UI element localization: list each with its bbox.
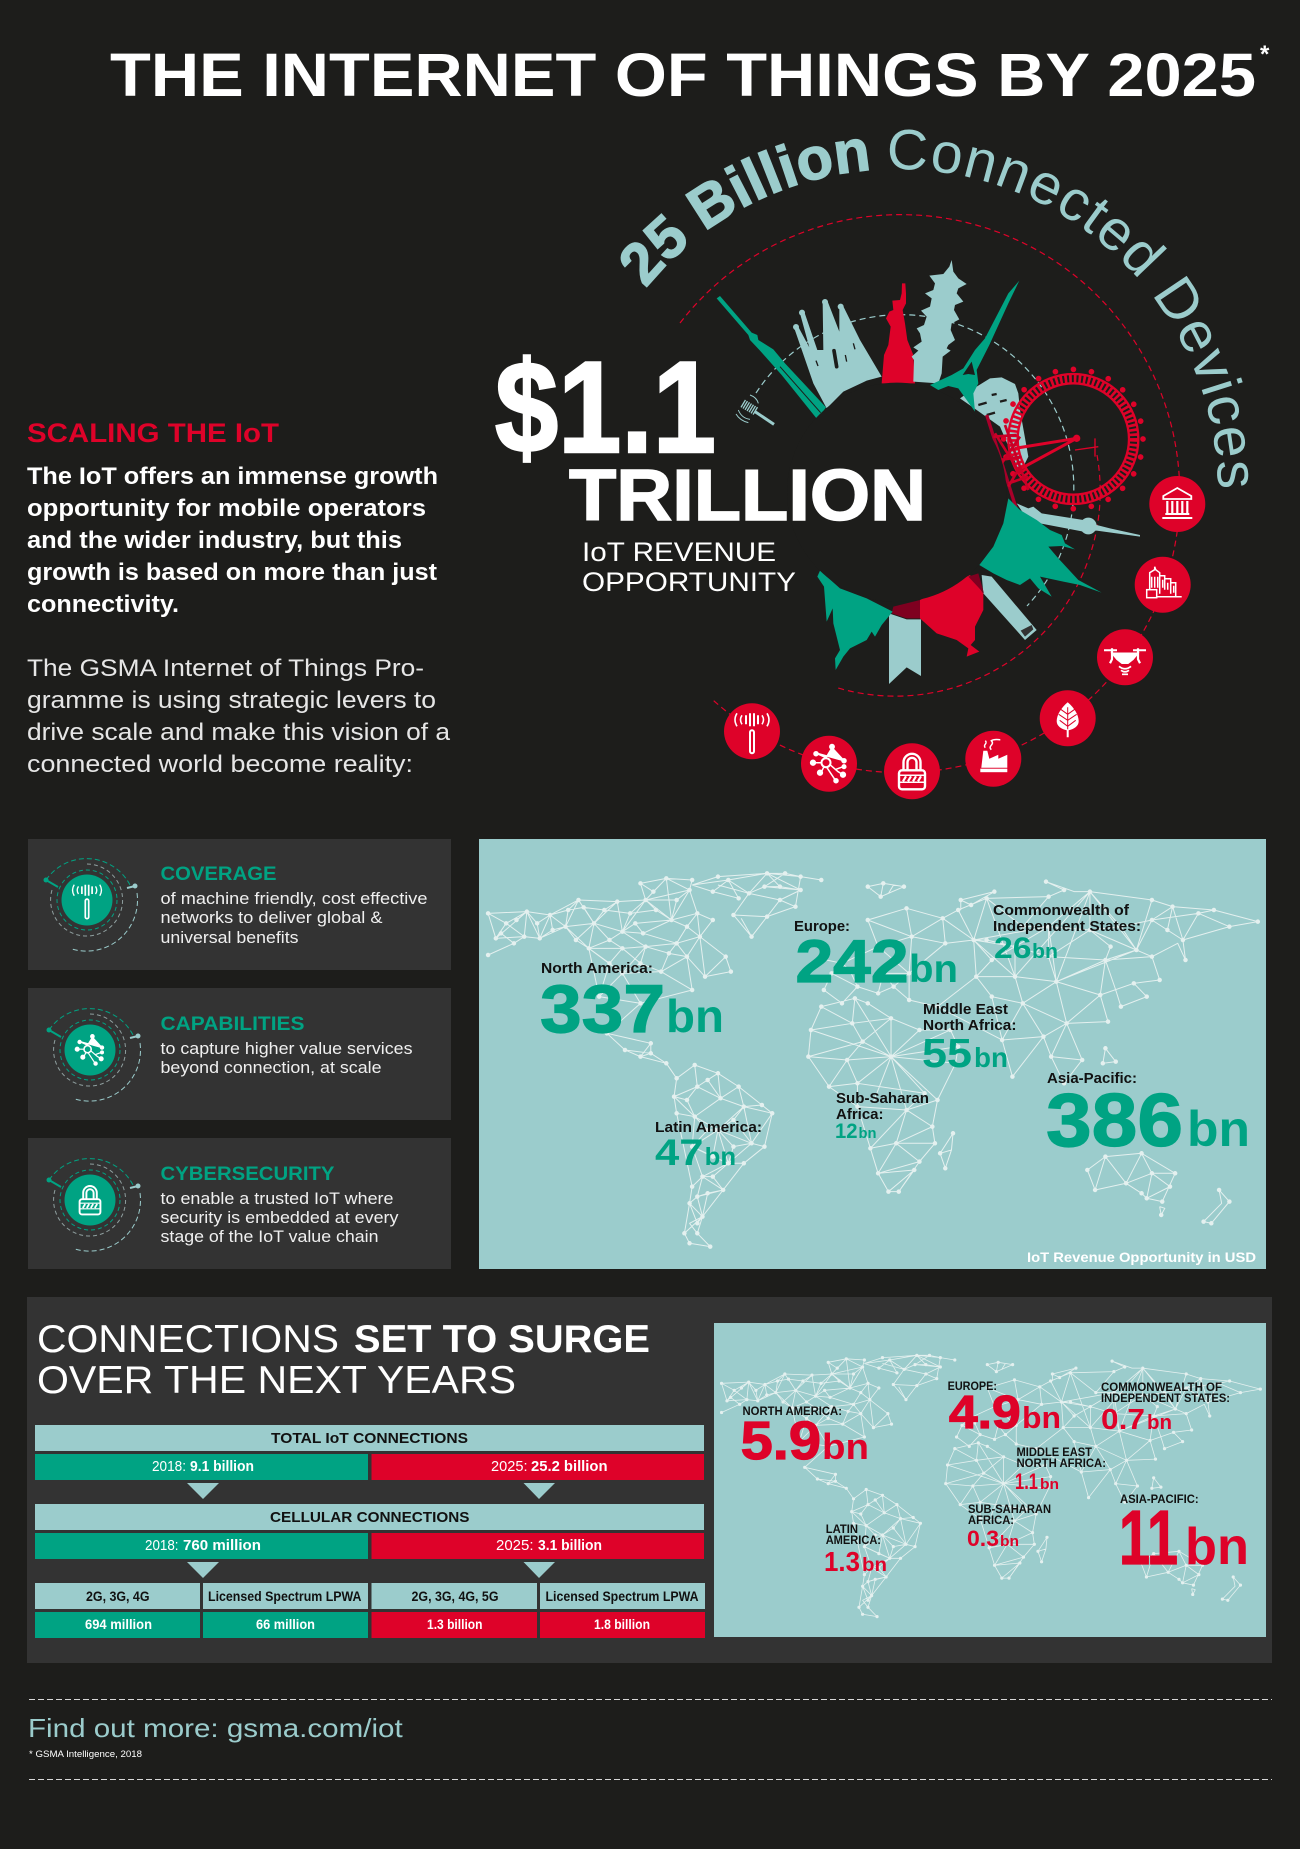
table: cellular connections [35, 1504, 704, 1559]
panel: capabilities [28, 988, 451, 1120]
text: coverage description: universal benefits [160, 929, 298, 947]
landmark: red skyline [920, 575, 983, 657]
region: sub-saharan africa: AFRICA: [968, 1513, 1014, 1527]
table: technology breakdown: 694 million [85, 1617, 152, 1632]
region: sub-saharan africa: Sub-Saharan [836, 1090, 929, 1107]
icon: cybersecurity padlock [46, 1159, 140, 1251]
table: technology breakdown: 2G, 3G, 4G, 5G [412, 1589, 498, 1604]
heading: coverage: COVERAGE [160, 864, 276, 885]
text: capabilities description [160, 1040, 412, 1077]
heading: connections set to surge: SET TO SURGE [354, 1318, 650, 1361]
table: total IoT connections: 25.2 billion [531, 1458, 608, 1475]
region: latin america [655, 1119, 762, 1173]
caption: IoT revenue opportunity: IoT REVENUE [582, 537, 776, 567]
headline figure: $1.1 trillion: $1.1 [495, 334, 716, 480]
table: cellular connections: 2025: [496, 1537, 534, 1554]
text block: bold intro: and the wider industry, but this [27, 527, 402, 554]
table: technology breakdown: 1.3 billion [427, 1617, 482, 1632]
icon: network [801, 736, 857, 792]
text: coverage description [160, 890, 428, 947]
icon: bank [1149, 476, 1205, 532]
region: sub-saharan africa: Africa: [836, 1106, 884, 1123]
region: sub-saharan africa: SUB-SAHARAN [968, 1502, 1051, 1516]
heading: connections set to surge: CONNECTIONS [37, 1318, 339, 1361]
ruler tower window [1021, 625, 1033, 637]
arrow: total to cellular 2025 [524, 1483, 555, 1499]
landmark: ribbon [889, 613, 921, 684]
region: middle east north africa: 1.1 [1015, 1469, 1038, 1494]
text: capabilities description: to capture higher value services [160, 1040, 412, 1058]
landmark: ruler tower [982, 575, 1037, 640]
region: europe: EUROPE: [948, 1379, 997, 1393]
region: sub-saharan africa [835, 1090, 929, 1143]
heading: scaling the IoT: SCALING THE IoT [27, 418, 280, 448]
text block: bold intro: opportunity for mobile operators [27, 495, 426, 522]
text: cybersecurity description [160, 1190, 399, 1246]
region: latin america: LATIN [826, 1522, 858, 1536]
caption: IoT revenue opportunity [582, 537, 796, 597]
region: europe [794, 918, 958, 995]
panel: connections set to surge [27, 1297, 1272, 1663]
landmark: statue of liberty [882, 283, 915, 383]
region: middle east north africa: NORTH AFRICA: [1016, 1456, 1106, 1470]
map caption: IoT Revenue Opportunity in USD [1027, 1249, 1256, 1265]
text block: bold intro [27, 463, 438, 618]
region: north america: NORTH AMERICA: [742, 1404, 842, 1418]
curved heading: 25 billion connected devices: Connected Devices [890, 130, 1248, 487]
table: total IoT connections: 9.1 billion [190, 1458, 254, 1475]
region: middle east north africa: bn [1040, 1476, 1059, 1493]
region: sub-saharan africa: 12 [835, 1120, 858, 1143]
text: cybersecurity description: stage of the IoT value chain [160, 1228, 378, 1246]
region: sub-saharan africa: bn [858, 1125, 876, 1142]
dashed orbit: outer red [680, 215, 1180, 773]
text block: bold intro: The IoT offers an immense growth [27, 463, 438, 490]
pearl tower sphere [1080, 518, 1097, 534]
region: europe [948, 1379, 1061, 1438]
region: commonwealth of independent states: COMMONWEALTH OF [1101, 1380, 1222, 1394]
region: north america [540, 960, 724, 1047]
icon: coverage antenna [44, 859, 138, 951]
text block: programme description: drive scale and make this vision of a [27, 719, 451, 746]
title: THE INTERNET OF THINGS BY 2025 [110, 41, 1256, 109]
region: north america [741, 1404, 869, 1471]
landmark: pagoda [912, 260, 967, 383]
region: asia-pacific: bn [1187, 1101, 1250, 1157]
landmark: green skyline left [817, 571, 893, 670]
icon: capabilities network [46, 1009, 140, 1101]
landmark: pearl tower [1017, 503, 1140, 537]
title: * [1260, 41, 1270, 68]
region: commonwealth of independent states [1101, 1380, 1230, 1436]
region: latin america [824, 1522, 887, 1577]
headline figure: $1.1 trillion: TRILLION [569, 456, 926, 536]
landmark: ferris wheel [987, 369, 1143, 510]
link: find out more: Find out more: gsma.com/iot [28, 1713, 404, 1743]
region: latin america: Latin America: [655, 1119, 762, 1136]
panel: cybersecurity [28, 1138, 451, 1269]
table: technology breakdown: Licensed Spectrum LPWA [546, 1589, 699, 1604]
table: technology breakdown: 1.8 billion [594, 1617, 650, 1632]
region: commonwealth of independent states: 0.7 [1101, 1404, 1145, 1436]
footnote: * GSMA Intelligence, 2018 [29, 1749, 142, 1759]
hero: connected world graphic [495, 130, 1248, 800]
heading: connections set to surge [37, 1318, 650, 1402]
region: north america: 5.9 [741, 1411, 821, 1471]
table: total IoT connections: 2025: [491, 1458, 528, 1475]
panel: connections map [714, 1323, 1266, 1637]
region: north america: bn [666, 990, 724, 1042]
table: total IoT connections [35, 1425, 704, 1480]
text block: programme description: gramme is using strategic levers to [27, 687, 436, 714]
table: cellular connections: 2018: [145, 1537, 178, 1554]
region: latin america: bn [705, 1143, 736, 1171]
text: cybersecurity description: to enable a trusted IoT where [160, 1190, 394, 1208]
region: asia-pacific: bn [1185, 1518, 1249, 1576]
table: total IoT connections: TOTAL IoT CONNECTIONS [271, 1430, 468, 1447]
region: middle east north africa: MIDDLE EAST [1016, 1445, 1093, 1459]
region: sub-saharan africa: 0.3 [967, 1526, 999, 1551]
panel: coverage [28, 839, 451, 970]
region: latin america: AMERICA: [826, 1533, 881, 1547]
text: cybersecurity description: security is embedded at every [160, 1209, 399, 1227]
icon: drone [1097, 629, 1153, 685]
region: asia-pacific [1119, 1492, 1249, 1581]
region: asia-pacific: 386 [1046, 1078, 1183, 1162]
region: commonwealth of independent states: bn [1147, 1412, 1172, 1434]
overlap shade: red [892, 600, 920, 618]
central disc [787, 383, 1006, 602]
dashed orbit: middle red [838, 455, 1100, 696]
icon: city [1135, 557, 1191, 613]
text block: programme description [27, 655, 451, 778]
heading: cybersecurity: CYBERSECURITY [160, 1164, 335, 1185]
icon: padlock [884, 743, 940, 799]
headline figure: $1.1 trillion [495, 334, 926, 536]
region: middle east north africa: bn [974, 1042, 1008, 1073]
table: cellular connections: CELLULAR CONNECTIONS [270, 1509, 470, 1526]
table: total IoT connections: 2018: [152, 1458, 186, 1475]
heading: capabilities: CAPABILITIES [160, 1014, 304, 1035]
region: latin america: 47 [655, 1132, 704, 1173]
text block: bold intro: growth is based on more than just [27, 559, 437, 586]
heading: connections set to surge: OVER THE NEXT YEARS [37, 1359, 516, 1402]
region: commonwealth of independent states: 26 [994, 932, 1032, 965]
region: europe: bn [1022, 1400, 1061, 1435]
table: technology breakdown: Licensed Spectrum LPWA [208, 1589, 362, 1604]
text: coverage description: networks to deliver global & [160, 909, 382, 927]
arrow: cellular 2018 to breakdown [187, 1562, 219, 1578]
arrow: cellular 2025 to breakdown [524, 1562, 555, 1578]
region: europe: Europe: [794, 918, 850, 935]
text: coverage description: of machine friendly, cost effective [160, 890, 428, 908]
text block: programme description: connected world become reality: [27, 751, 413, 778]
world network map [722, 1355, 1260, 1617]
world network map [488, 873, 1258, 1247]
region: north america: 337 [540, 971, 665, 1047]
region: middle east north africa: Middle East [923, 1001, 1008, 1018]
region: commonwealth of independent states: INDEPENDENT STATES: [1101, 1391, 1230, 1405]
text block: programme description: The GSMA Internet of Things Pro- [27, 655, 424, 682]
region: middle east north africa: North Africa: [923, 1017, 1016, 1034]
region: sub-saharan africa: bn [1000, 1533, 1019, 1550]
footer [28, 1700, 1272, 1780]
region: asia-pacific [1046, 1070, 1250, 1162]
region: north america: bn [822, 1426, 869, 1467]
region: asia-pacific: 11 [1119, 1495, 1178, 1581]
text: capabilities description: beyond connection, at scale [160, 1059, 382, 1077]
table: technology breakdown [35, 1583, 705, 1638]
icon: antenna [724, 703, 780, 759]
arrow: total to cellular 2018 [187, 1483, 219, 1499]
landmark: building [960, 377, 1028, 473]
region: europe: 4.9 [949, 1386, 1021, 1438]
curved heading: 25 billion connected devices: 25 Billion [620, 138, 870, 288]
table: cellular connections: 3.1 billion [538, 1537, 602, 1554]
region: middle east north africa: 55 [922, 1030, 972, 1076]
region: asia-pacific: ASIA-PACIFIC: [1120, 1492, 1199, 1506]
landmarks around the globe [717, 260, 1143, 684]
region: latin america: 1.3 [824, 1546, 860, 1577]
region: europe: bn [909, 948, 958, 991]
overlap shade: right [968, 573, 984, 593]
region: sub-saharan africa [967, 1502, 1051, 1551]
icon: leaf [1040, 690, 1096, 746]
dashed orbit: inner teal [756, 315, 1074, 606]
region: europe: 242 [796, 928, 908, 995]
region: commonwealth of independent states: Independent States: [993, 918, 1141, 935]
caption: IoT revenue opportunity: OPPORTUNITY [582, 567, 796, 597]
region: latin america: bn [862, 1555, 887, 1576]
landmark: cathedral [793, 299, 882, 408]
table: technology breakdown: 2G, 3G, 4G [86, 1589, 150, 1604]
icon: factory [965, 731, 1021, 787]
region: middle east north africa [1015, 1445, 1106, 1494]
small hammer icon [736, 395, 774, 424]
landmark: green tower [717, 296, 826, 419]
region: commonwealth of independent states: Commonwealth of [993, 902, 1130, 919]
table: technology breakdown: 66 million [256, 1617, 315, 1632]
region: asia-pacific: Asia-Pacific: [1047, 1070, 1137, 1087]
curved heading: 25 billion connected devices [620, 130, 1248, 487]
table: cellular connections: 760 million [183, 1537, 261, 1554]
text block: bold intro: connectivity. [27, 591, 179, 618]
region: north america: North America: [541, 960, 653, 977]
landmark: green skyline right [979, 498, 1102, 597]
region: commonwealth of independent states [993, 902, 1141, 965]
region: commonwealth of independent states: bn [1032, 941, 1058, 963]
region: middle east north africa [922, 1001, 1016, 1076]
landmark: eiffel tower [930, 281, 1019, 412]
panel: revenue opportunity map [479, 839, 1266, 1269]
